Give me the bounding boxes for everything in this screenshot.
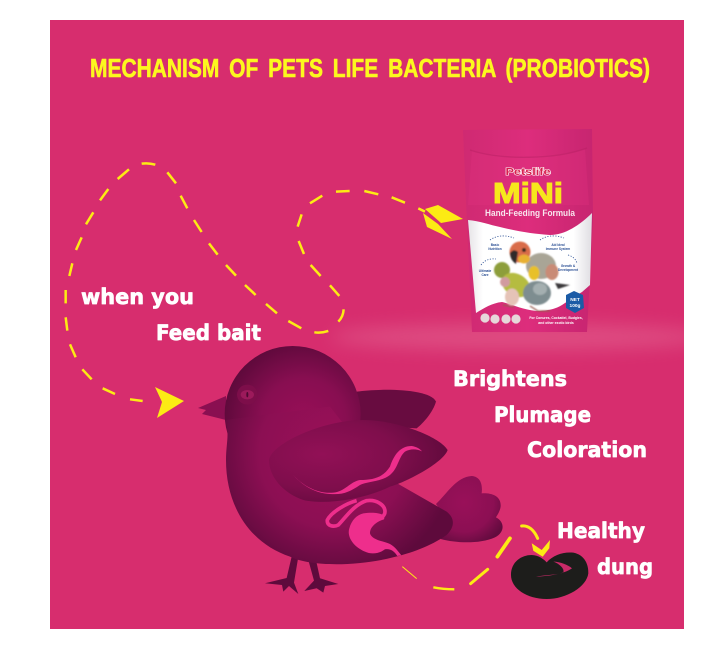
feed label: when you [81, 285, 194, 309]
benefit captions: Immune System [546, 247, 570, 251]
product subtitle: Hand-Feeding Formula [485, 208, 575, 218]
bird illustration [198, 346, 503, 594]
tail [436, 476, 503, 542]
net weight badge: 100g [570, 303, 581, 309]
brand name: Petslife [506, 166, 551, 178]
benefit captions: Growth & [561, 264, 576, 268]
front wing [269, 420, 448, 502]
back wing [357, 390, 436, 428]
dotted arcs around captions [481, 236, 577, 265]
product name: MiNi [493, 178, 563, 210]
floor glow behind product [330, 324, 705, 350]
digestive tract [327, 500, 385, 526]
benefit captions [479, 243, 579, 277]
head [225, 346, 361, 482]
arrowhead pointing to bird beak [155, 387, 184, 418]
plumage benefit label [453, 367, 647, 462]
benefit captions: Aid Ideal [551, 243, 565, 247]
feed label: Feed bait [156, 321, 261, 345]
dashed flight path from product to bird [66, 163, 425, 401]
dung label: dung [597, 555, 653, 579]
plumage benefit label: Brightens [453, 367, 567, 391]
pictogram circles and usage note: For Conures, Cockatiel, Budgies, [529, 316, 583, 320]
dung icon [511, 552, 588, 599]
dashed path from bird to dung [402, 526, 538, 589]
feed label [81, 285, 261, 345]
white label area [468, 213, 592, 313]
benefit captions: Basic [491, 243, 499, 247]
plumage benefit label: Coloration [527, 438, 647, 462]
net weight badge [566, 291, 584, 313]
beak [198, 396, 226, 420]
eye [237, 385, 258, 405]
product bag [463, 129, 593, 332]
net weight badge: NET [570, 297, 580, 303]
arrowhead pointing to dung [532, 540, 550, 557]
benefit captions: Development [558, 268, 579, 272]
body [225, 407, 453, 564]
dung label: Healthy [557, 519, 645, 543]
pictogram circles and usage note [480, 313, 583, 325]
legs and feet [265, 557, 338, 594]
benefit captions: Care [481, 273, 489, 277]
benefit captions: Ultimate [479, 269, 492, 273]
intestine in wing [292, 446, 422, 494]
plumage benefit label: Plumage [494, 403, 591, 427]
pictogram circles and usage note: and other exotic birds [538, 321, 574, 325]
dung label [557, 519, 653, 579]
benefit captions: Nutrition [488, 247, 502, 251]
stomach [349, 513, 401, 556]
parrot chicks [494, 242, 570, 311]
arrowhead pointing to product [423, 205, 463, 239]
